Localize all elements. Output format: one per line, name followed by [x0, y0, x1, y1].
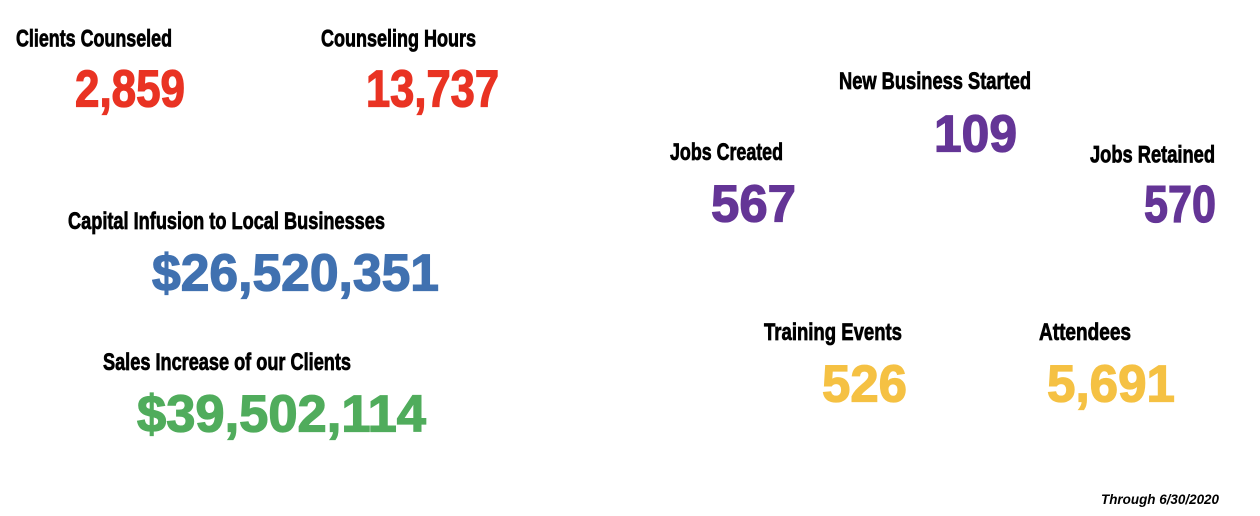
stat: sales increase — [103, 349, 426, 444]
label: new business started: New Business Started — [839, 68, 1031, 95]
stat: clients counseled — [16, 26, 185, 118]
number: 570: 570 — [1144, 176, 1216, 234]
label: sales increase: Sales Increase of our Clients — [103, 349, 351, 376]
label: clients counseled: Clients Counseled — [16, 26, 172, 52]
label: attendees: Attendees — [1039, 319, 1131, 346]
stat: counseling hours — [321, 26, 499, 118]
stat: jobs retained — [1090, 142, 1216, 234]
stat: new business started — [839, 68, 1031, 164]
footnote: date: Through 6/30/2020 — [1101, 491, 1219, 507]
stat: jobs created — [670, 139, 796, 234]
number: 109: 109 — [934, 106, 1017, 164]
number: 526: 526 — [822, 356, 907, 414]
number: 567: 567 — [711, 176, 796, 234]
label: jobs created: Jobs Created — [670, 139, 783, 166]
number: 5,691: 5,691 — [1047, 356, 1175, 414]
number: 13,737: 13,737 — [366, 60, 499, 118]
label: counseling hours: Counseling Hours — [321, 26, 476, 52]
number: 2,859: 2,859 — [75, 60, 185, 118]
stat: attendees — [1039, 319, 1175, 414]
number: $26,520,351: $26,520,351 — [152, 244, 439, 302]
label: capital infusion: Capital Infusion to Local Businesses — [68, 208, 385, 235]
label: jobs retained: Jobs Retained — [1090, 142, 1215, 168]
stat: capital infusion — [68, 208, 439, 302]
stat: training events — [764, 319, 907, 414]
label: training events: Training Events — [764, 319, 902, 346]
number: $39,502,114: $39,502,114 — [137, 386, 426, 444]
